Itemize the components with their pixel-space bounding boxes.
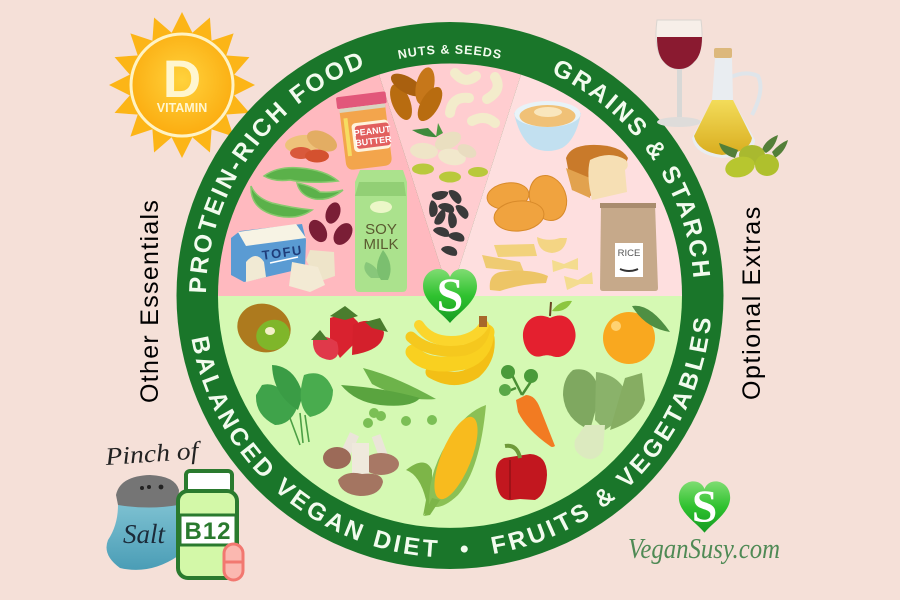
heading: grains and starch: GRAINS & STARCH [554, 61, 710, 277]
icon: tofu: TOFU [261, 242, 304, 263]
icon: salt shaker [106, 475, 179, 570]
icon: olives [719, 135, 788, 181]
label: other essentials: Other Essentials [136, 199, 164, 403]
icon: potatoes [485, 170, 573, 234]
icon: mushrooms [323, 432, 399, 496]
segment: nuts and seeds [379, 63, 521, 296]
icon: strawberries [311, 306, 388, 360]
icon: sunflower seeds [428, 187, 471, 258]
heading: balanced vegan diet, fruits and vegetables: BALANCED VEGAN DIET • FRUITS & VEGETABLES [192, 318, 710, 557]
icon: vitamin D sun: VITAMIN [157, 101, 207, 115]
icon: brand heart: S [692, 480, 717, 531]
icon: vitamin D sun: D [163, 50, 201, 109]
text: VeganSusy.com: VeganSusy.com [628, 533, 780, 565]
icon: B12 bottle: B12 [184, 518, 232, 545]
icon: salt shaker: Salt [123, 519, 167, 549]
icon: apple [523, 301, 576, 357]
icon: oatmeal bowl [514, 101, 581, 151]
icon: kidney beans [305, 200, 356, 248]
icon: brand heart [679, 480, 730, 533]
icon: kiwi [230, 296, 298, 360]
icon: wine glass [656, 20, 702, 127]
icon: soy milk carton: SOY [365, 221, 397, 238]
icon: almonds [386, 66, 447, 125]
icon: edamame pods [251, 168, 343, 217]
icon: pistachios [409, 123, 488, 182]
icon: olive oil bottle [692, 48, 760, 158]
icon: soy milk carton: MILK [363, 236, 399, 253]
icon: pasta [482, 237, 593, 291]
segment: grains and starch [450, 75, 682, 296]
icon: peanuts [284, 126, 340, 162]
icon: corn [406, 405, 486, 516]
icon: vitamin D sun [109, 12, 255, 158]
icon: B12 bottle [178, 471, 243, 580]
icon: carrot [499, 365, 555, 447]
segment: protein-rich food [218, 75, 450, 296]
icon: tofu [231, 224, 335, 292]
segment: fruits and vegetables [218, 296, 682, 528]
panel: plate [176, 22, 724, 569]
icon: bananas [411, 316, 488, 378]
icon: spinach [256, 365, 333, 445]
icon: peanut butter jar: PEANUT [353, 124, 392, 138]
icon: green peas [341, 368, 437, 428]
plate ring [176, 22, 724, 569]
icon: centre heart logo: S [437, 269, 463, 322]
icon: bread loaf [566, 145, 628, 200]
icon: soy milk carton [355, 170, 407, 292]
icon: cashews [450, 73, 498, 123]
heading: nuts and seeds: NUTS & SEEDS [398, 45, 501, 59]
icon: rice bag: RICE [618, 248, 640, 259]
label: optional extras: Optional Extras [738, 205, 766, 400]
icon: bok choy [563, 369, 645, 459]
heading: protein-rich food: PROTEIN-RICH FOOD [189, 54, 362, 292]
icon: peanut butter jar [336, 91, 395, 171]
icon: centre heart logo [423, 269, 477, 323]
icon: peanut butter jar: BUTTER [355, 134, 393, 148]
icon: orange [603, 306, 670, 364]
text: pinch of: Pinch of [103, 437, 203, 471]
icon: rice bag [600, 203, 658, 291]
icon: red bell pepper [496, 446, 547, 500]
